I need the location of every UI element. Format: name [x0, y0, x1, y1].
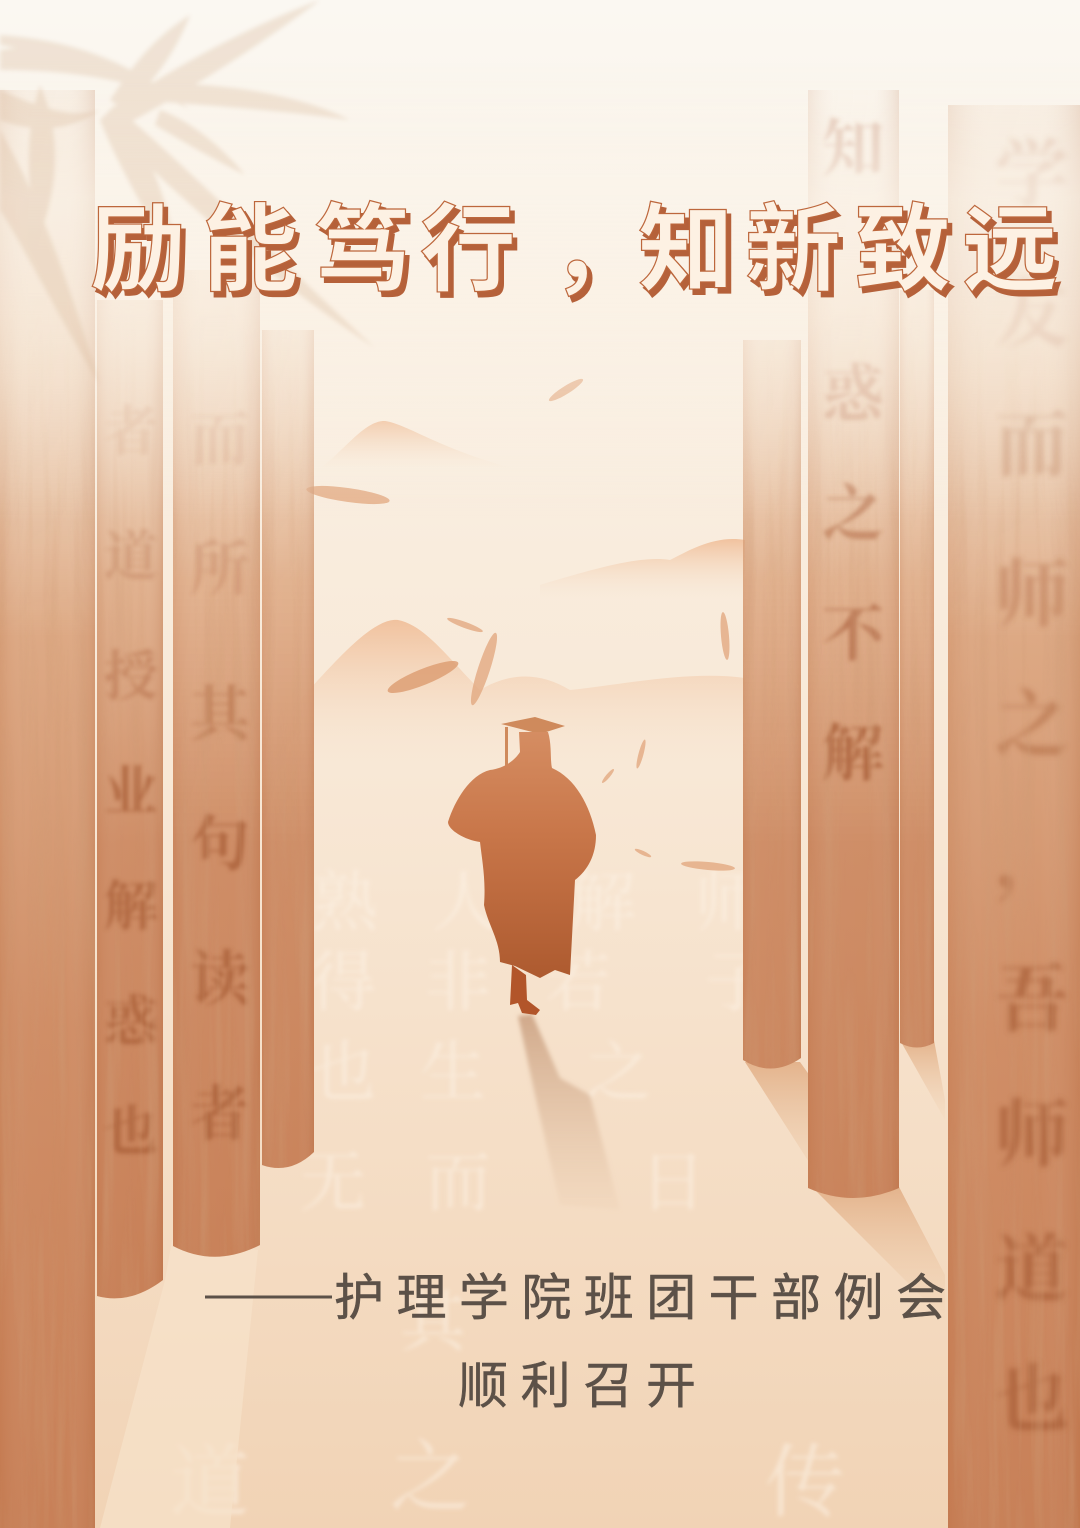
far right column with inscription: 师	[995, 555, 1069, 637]
ground calligraphy	[170, 867, 845, 1528]
title shadow: 知	[642, 202, 738, 309]
title face: ，	[550, 197, 646, 304]
title face: 能	[202, 197, 298, 304]
subtitle	[205, 1270, 946, 1414]
ground calligraphy: 而	[425, 1147, 491, 1220]
back column right	[900, 290, 934, 1048]
column 6 with inscription: 惑	[822, 361, 887, 429]
ground calligraphy: 师	[695, 867, 761, 940]
far right column with inscription: 而	[995, 405, 1069, 487]
column 3 with inscription: 其	[190, 682, 258, 748]
column 3 with inscription: 所	[190, 537, 250, 603]
far right column with inscription	[948, 105, 1080, 1528]
title shadow: 行	[424, 202, 520, 309]
title face	[90, 197, 1058, 304]
ground calligraphy: 日	[640, 1147, 706, 1220]
ground calligraphy: 传	[765, 1440, 845, 1528]
title shadow: 远	[966, 202, 1062, 309]
column 2 with inscription: 解	[104, 877, 158, 937]
title face: 致	[855, 197, 951, 304]
column 3 with inscription: 读	[190, 947, 252, 1013]
title shadow: 致	[859, 202, 955, 309]
column 2 with inscription: 业	[104, 762, 158, 822]
column 6 with inscription: 解	[822, 721, 884, 789]
ground calligraphy: 人	[432, 867, 498, 940]
column 2 with inscription: 惑	[104, 992, 160, 1052]
figure shadow	[518, 1014, 620, 1210]
ground calligraphy: 道	[170, 1440, 250, 1528]
bamboo branch	[0, 0, 375, 385]
title shadow: 新	[749, 202, 845, 309]
ground calligraphy: 解	[570, 867, 636, 940]
title face: 笃	[314, 197, 410, 304]
far right column with inscription: 学	[995, 135, 1069, 217]
column 6 with inscription: 之	[822, 481, 884, 549]
ground calligraphy: 非	[425, 947, 491, 1020]
far right column with inscription: 吾	[995, 960, 1069, 1042]
ground calligraphy: 之	[390, 1435, 470, 1523]
subtitle: 护理学院班团干部例会	[334, 1270, 946, 1326]
column 5	[743, 340, 801, 1069]
robe	[448, 732, 596, 978]
ground calligraphy: 子	[705, 947, 771, 1020]
title face: 新	[745, 197, 841, 304]
mortarboard	[501, 717, 565, 734]
title face: 远	[962, 197, 1058, 304]
column 2 with inscription: 授	[104, 647, 158, 707]
far right column with inscription: ，	[995, 820, 1069, 903]
title	[90, 197, 1062, 309]
ground calligraphy: 得	[310, 947, 376, 1020]
column 2 with inscription: 者	[104, 402, 158, 462]
title shadow	[94, 202, 1062, 309]
title shadow: 能	[206, 202, 302, 309]
ground calligraphy: 也	[310, 1037, 376, 1110]
ground calligraphy: 熟	[312, 867, 379, 940]
ground calligraphy: 无	[300, 1147, 366, 1220]
ground calligraphy: 之	[585, 1037, 651, 1110]
subtitle: 顺利召开	[458, 1358, 696, 1414]
far right column with inscription: 友	[995, 275, 1069, 357]
column 3 with inscription: 而	[190, 407, 250, 473]
wood grain on columns	[60, 480, 1080, 1513]
far right column with inscription: 之	[995, 685, 1069, 767]
column 6 with inscription: 不	[822, 601, 886, 669]
far left column	[0, 90, 95, 1528]
column 3 with inscription: 者	[190, 1082, 250, 1148]
title shadow: 励	[94, 202, 190, 309]
falling leaves	[305, 376, 735, 872]
title face: 行	[420, 197, 516, 304]
title face: 励	[90, 197, 186, 304]
far right column with inscription: 师	[995, 1095, 1069, 1177]
mist over columns	[0, 60, 1080, 520]
column 6 with inscription: 知	[822, 116, 884, 184]
ground calligraphy: 生	[420, 1037, 486, 1110]
column 2 with inscription	[97, 300, 163, 1298]
far right column with inscription: 道	[995, 1230, 1069, 1312]
title shadow: ，	[554, 202, 650, 309]
mountains	[300, 421, 745, 770]
column 3 with inscription	[173, 270, 260, 1257]
title shadow: 笃	[318, 202, 414, 309]
column 2 with inscription: 道	[104, 527, 158, 587]
column 2 with inscription: 也	[104, 1102, 158, 1162]
column 6 with inscription	[808, 90, 899, 1198]
ground calligraphy: 其	[400, 1287, 469, 1360]
legs	[510, 965, 540, 1015]
title face: 知	[638, 197, 734, 304]
ground calligraphy: 若	[545, 947, 611, 1020]
back column left	[262, 330, 314, 1168]
column floor shadows	[100, 1040, 945, 1528]
column 3 with inscription: 句	[190, 812, 250, 878]
far right column with inscription: 也	[995, 1360, 1069, 1442]
graduate figure	[448, 717, 596, 1015]
